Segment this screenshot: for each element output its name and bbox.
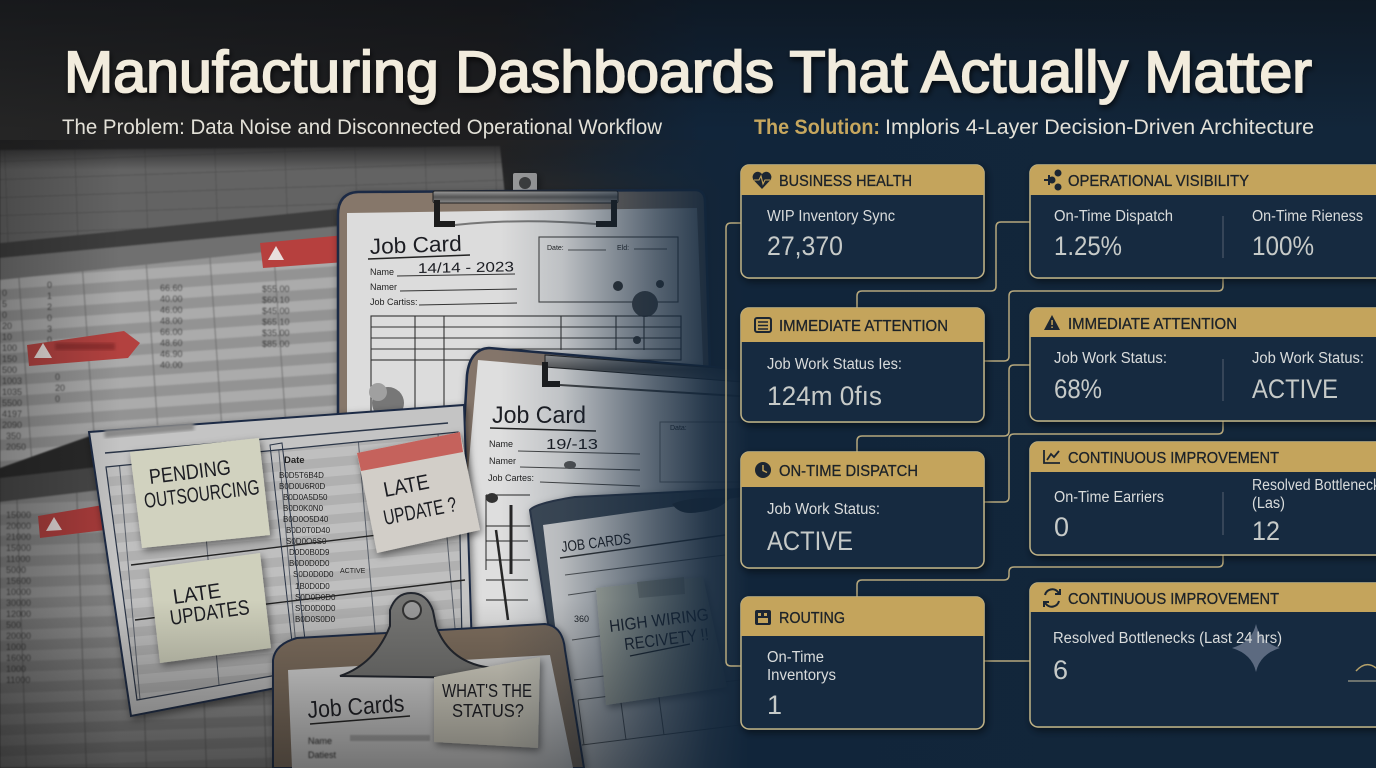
table column: codes: S0D0O6S0 — [286, 537, 327, 546]
text: form fields: Name — [370, 267, 394, 277]
divider — [1222, 216, 1224, 258]
spreadsheet: upper sheet: 1035 — [2, 387, 22, 397]
spreadsheet: upper sheet: 66.00 — [160, 327, 183, 337]
spreadsheet: upper sheet: $85.00 — [262, 339, 290, 349]
spreadsheet: upper sheet: 1003 — [2, 376, 22, 386]
spreadsheet: lower sheet: 500 — [6, 620, 21, 630]
text: form fields 2: Namer — [489, 456, 516, 466]
card: immediate attention right — [1030, 308, 1376, 421]
spreadsheet: upper sheet: 0 — [2, 310, 7, 320]
sticky note: late update question: UPDATE ? — [382, 493, 459, 530]
spreadsheet: lower sheet: 1000 — [6, 664, 26, 674]
heading: operational visibility: OPERATIONAL VISIBILITY — [1068, 173, 1249, 190]
label: job work status: Job Work Status: — [767, 501, 880, 518]
form: ink marks — [486, 461, 576, 620]
clip: large clipboard — [433, 191, 618, 225]
value: 68%: 68% — [1054, 374, 1102, 404]
table heading: date: Date — [284, 455, 305, 466]
icon: list — [755, 318, 771, 332]
spreadsheet: upper sheet: 3 — [47, 324, 52, 334]
panel: problem collage — [0, 140, 780, 768]
form: date box: Eld: — [617, 245, 629, 252]
overlay: navy fade — [500, 140, 770, 768]
folder: job cards — [526, 489, 730, 768]
sticky note: pending outsourcing: OUTSOURCING — [143, 476, 261, 513]
overlay: bottom vignette — [0, 613, 715, 768]
heading: continuous improvement: CONTINUOUS IMPROVEMENT — [1068, 591, 1279, 608]
spreadsheet: upper sheet: 0 — [55, 372, 60, 382]
heading: immediate attention: IMMEDIATE ATTENTION — [779, 318, 948, 335]
label: on-time inventorys — [767, 649, 836, 684]
spreadsheet: lower sheet: 15600 — [6, 576, 31, 586]
icon: warning — [1044, 315, 1060, 330]
spreadsheet: lower sheet: 16000 — [6, 653, 31, 663]
sticky note: what's the status: STATUS? — [452, 701, 524, 721]
clipboard: second job card — [461, 344, 730, 628]
spreadsheet: upper sheet: 66.60 — [160, 283, 183, 293]
icon: calendar — [755, 610, 771, 625]
spreadsheet: lower sheet: 11000 — [6, 675, 30, 685]
clip: bulldog clip — [340, 593, 493, 678]
table column: codes: 1B0D0D0 — [295, 582, 330, 591]
spreadsheet: upper sheet: 40.00 — [160, 360, 183, 370]
spreadsheet: lower sheet: 15000 — [6, 543, 31, 553]
spreadsheet: upper sheet: 0 — [47, 280, 52, 290]
divider — [1222, 492, 1224, 535]
card: immediate attention left — [741, 308, 984, 422]
top band shading — [0, 0, 1376, 130]
label: on-time earriers: On-Time Earriers — [1054, 489, 1164, 506]
spreadsheet: upper sheet: 20 — [55, 383, 65, 393]
value: active: ACTIVE — [767, 526, 853, 556]
sticky note: late updates — [149, 553, 271, 663]
table column: codes: ACTIVE — [340, 568, 366, 575]
text: blurred fields — [308, 735, 430, 760]
table: job card grid — [370, 315, 682, 411]
label: resolved bottlenecks: (Las) — [1252, 495, 1285, 512]
spreadsheet: upper sheet: 48.00 — [160, 316, 183, 326]
heading: business health: BUSINESS HEALTH — [779, 173, 912, 190]
spreadsheet: upper sheet: 5 — [2, 299, 7, 309]
value: 0: 0 — [1054, 512, 1069, 542]
spreadsheet: upper sheet: $65.10 — [262, 317, 290, 327]
label: job work status 2: Job Work Status: — [1252, 350, 1364, 367]
spreadsheet: upper sheet: 0 — [2, 288, 7, 298]
label: on-time dispatch: On-Time Dispatch — [1054, 208, 1173, 225]
mark: ink smear — [674, 500, 728, 513]
text: form fields — [370, 258, 517, 307]
table column: codes: B0D0T0D40 — [286, 526, 331, 535]
spreadsheet: upper sheet: 500 — [2, 365, 17, 375]
spreadsheet: upper sheet: 40.00 — [160, 294, 183, 304]
stain: coffee spill — [369, 383, 404, 410]
sticky note: what's the status — [434, 657, 540, 748]
text: form fields: Namer — [370, 282, 397, 292]
card: business health — [741, 165, 984, 278]
label: on-time inventorys: Inventorys — [767, 667, 836, 684]
value: 100%: 100% — [1252, 231, 1314, 261]
icon: line chart — [1044, 450, 1060, 463]
text: blurred fields: Datiest — [308, 750, 337, 760]
text: form fields 2: 19/-13 — [546, 436, 598, 453]
spreadsheet: upper sheet: 46.90 — [160, 349, 183, 359]
spreadsheet: lower sheet: 12000 — [6, 609, 31, 619]
spreadsheet: upper sheet: 0 — [55, 394, 60, 404]
spreadsheet: lower sheet: 1000 — [6, 642, 26, 652]
spreadsheet: lower sheet: 30000 — [6, 598, 31, 608]
label: on-time rieness: On-Time Rieness — [1252, 208, 1363, 225]
table column: codes: B0D0U6R0D — [279, 482, 325, 491]
heading: routing: ROUTING — [779, 610, 845, 627]
table column: codes: S0D0D0D0 — [293, 570, 334, 579]
subtitle: solution: Imploris 4-Layer Decision-Driven Architecture — [885, 116, 1314, 139]
icon: arch mark — [1348, 665, 1376, 681]
spreadsheet: upper sheet: 1 — [47, 291, 52, 301]
text: form fields: Job Cartiss: — [370, 297, 418, 307]
title: Manufacturing Dashboards That Actually Matter — [64, 40, 1312, 105]
label: resolved bottlenecks — [1252, 477, 1376, 512]
spreadsheet: lower sheet: 20000 — [6, 631, 31, 641]
icon: heart pulse — [753, 172, 771, 189]
spreadsheet: upper sheet: 100 — [2, 343, 17, 353]
sticky note: pending outsourcing: PENDING — [148, 456, 232, 489]
sticky note: what's the status: WHAT'S THE — [442, 681, 532, 701]
text: job cards heading: Job Cards — [307, 690, 405, 724]
spreadsheet: upper sheet: $60.10 — [262, 295, 290, 305]
text: job cards label: JOB CARDS — [560, 531, 632, 556]
alert tag: top — [260, 236, 337, 268]
icon: nodes — [1044, 170, 1062, 190]
spreadsheet: upper sheet: 0 — [47, 335, 52, 345]
heading: on-time dispatch: ON-TIME DISPATCH — [779, 463, 918, 480]
spreadsheet: upper sheet: 10 — [2, 332, 12, 342]
subtitle: solution: The Solution: — [754, 116, 880, 139]
backdrop: desk — [504, 171, 636, 190]
overlay: top fade — [0, 140, 570, 166]
spreadsheet: upper sheet: 2 — [47, 302, 52, 312]
text: form fields: 14/14 - 2023 — [418, 258, 514, 276]
alert tag: lower — [38, 505, 105, 538]
heading: continuous improvement: CONTINUOUS IMPROVEMENT — [1068, 450, 1279, 467]
spreadsheet: upper sheet: 0 — [47, 313, 52, 323]
spreadsheet: upper sheet: 20 — [2, 321, 12, 331]
label: blurred sheet title — [104, 422, 194, 438]
spreadsheet: upper sheet: $55.00 — [262, 284, 290, 294]
spreadsheet: upper sheet: 46.00 — [160, 305, 183, 315]
value: 12: 12 — [1252, 516, 1280, 546]
form: date box: Date: — [547, 245, 564, 252]
table column: codes: B0D0O5D40 — [283, 515, 329, 524]
label: wip inventory sync: WIP Inventory Sync — [767, 208, 895, 225]
spreadsheet: upper sheet: 48.60 — [160, 338, 183, 348]
sticky note: late update question — [357, 432, 480, 553]
job sheet with table — [89, 405, 472, 716]
label: on-time inventorys: On-Time — [767, 649, 824, 666]
card: routing — [741, 597, 984, 729]
spreadsheet: lower sheet: 21000 — [6, 532, 31, 542]
text: form fields 2: Name — [489, 439, 513, 449]
card: on-time dispatch — [741, 452, 984, 568]
sticky note: late updates: UPDATES — [168, 596, 251, 630]
form: date box — [539, 237, 678, 344]
icon: refresh — [1044, 589, 1060, 607]
icon: sparkle — [1232, 624, 1280, 672]
spreadsheet: upper sheet — [0, 146, 506, 468]
clipboard: job cards — [273, 593, 584, 768]
table column: codes: B0D0D0D0 — [289, 559, 330, 568]
value: active: ACTIVE — [1252, 374, 1338, 404]
spreadsheet: upper sheet: 4197 — [2, 409, 22, 419]
table column: codes: B0D0A5D50 — [283, 493, 328, 502]
spreadsheet: upper sheet: 350 — [6, 431, 21, 441]
sticky note: high wiring: RECIVETY !! — [623, 625, 710, 654]
table column: codes: S0D0D0D0 — [295, 593, 336, 602]
spreadsheet: lower sheet: 11000 — [6, 554, 30, 564]
label: job work status: Job Work Status Ies: — [767, 356, 902, 373]
table column: codes — [279, 471, 366, 624]
spreadsheet: upper sheet: 5500 — [2, 398, 22, 408]
label: resolved bottlenecks last 24 hrs: Resolved Bottlenecks (Last 24 hrs) — [1053, 630, 1282, 647]
spreadsheet: upper sheet: 150 — [2, 354, 17, 364]
clip: second clipboard — [542, 354, 725, 396]
card: operational visibility — [1030, 165, 1376, 278]
value: 1.25%: 1.25% — [1054, 231, 1122, 261]
spreadsheet: lower sheet: 20000 — [6, 521, 31, 531]
sticky note: late updates: LATE — [171, 579, 222, 609]
spreadsheet: upper sheet: 2050 — [6, 442, 26, 452]
value: 6: 6 — [1053, 655, 1068, 685]
overlay: left vignette — [0, 150, 102, 768]
table column: codes: D0D0B0D9 — [289, 548, 330, 557]
folder: job cards: 360 — [574, 614, 589, 624]
clipboard: large job card — [338, 173, 712, 440]
alert tag: arrow — [27, 331, 140, 366]
icon: clock — [755, 462, 771, 478]
value: 1: 1 — [767, 690, 782, 720]
label: job work status: Job Work Status: — [1054, 350, 1167, 367]
text: form fields 2: Data: — [670, 425, 687, 432]
table column: codes: B0D5T6B4D — [279, 471, 324, 480]
heading: immediate attention: IMMEDIATE ATTENTION — [1068, 316, 1237, 333]
spreadsheet: lower sheet: 15000 — [6, 510, 31, 520]
text: form fields 2 — [488, 422, 716, 486]
spreadsheet: lower sheet — [0, 467, 272, 768]
sticky note: late update question: LATE — [382, 471, 431, 502]
card: continuous improvement upper — [1030, 442, 1376, 555]
sticky note: high wiring: HIGH WIRING — [608, 605, 710, 636]
value: 27,370: 27,370 — [767, 231, 843, 261]
card: continuous improvement lower — [1030, 583, 1376, 727]
text: job card heading 2: Job Card — [492, 402, 586, 429]
table column: codes: B0D0S0D0 — [295, 615, 336, 624]
spreadsheet: upper sheet: 2090 — [2, 420, 22, 430]
text: job card heading: Job Card — [369, 231, 462, 259]
text: blurred fields: Name — [308, 736, 332, 746]
spreadsheet: lower sheet: 5000 — [6, 565, 26, 575]
divider — [1222, 359, 1224, 401]
text: form fields 2: Job Cartes: — [488, 473, 534, 483]
value: 124m 0fis: 124m 0fıs — [767, 381, 882, 411]
spreadsheet: upper sheet: $35.00 — [262, 328, 290, 338]
table column: codes: B0D0K0N0 — [283, 504, 324, 513]
table column: codes: S0D0D0D0 — [295, 604, 336, 613]
connectors — [726, 222, 1223, 666]
spreadsheet: lower sheet: 10000 — [6, 587, 31, 597]
sticky note: high wiring — [596, 577, 727, 705]
spreadsheet: upper sheet: $45.00 — [262, 306, 290, 316]
subtitle: problem: The Problem: Data Noise and Disconnected Operational Workflow — [62, 116, 663, 139]
sticky note: pending outsourcing — [130, 438, 270, 548]
